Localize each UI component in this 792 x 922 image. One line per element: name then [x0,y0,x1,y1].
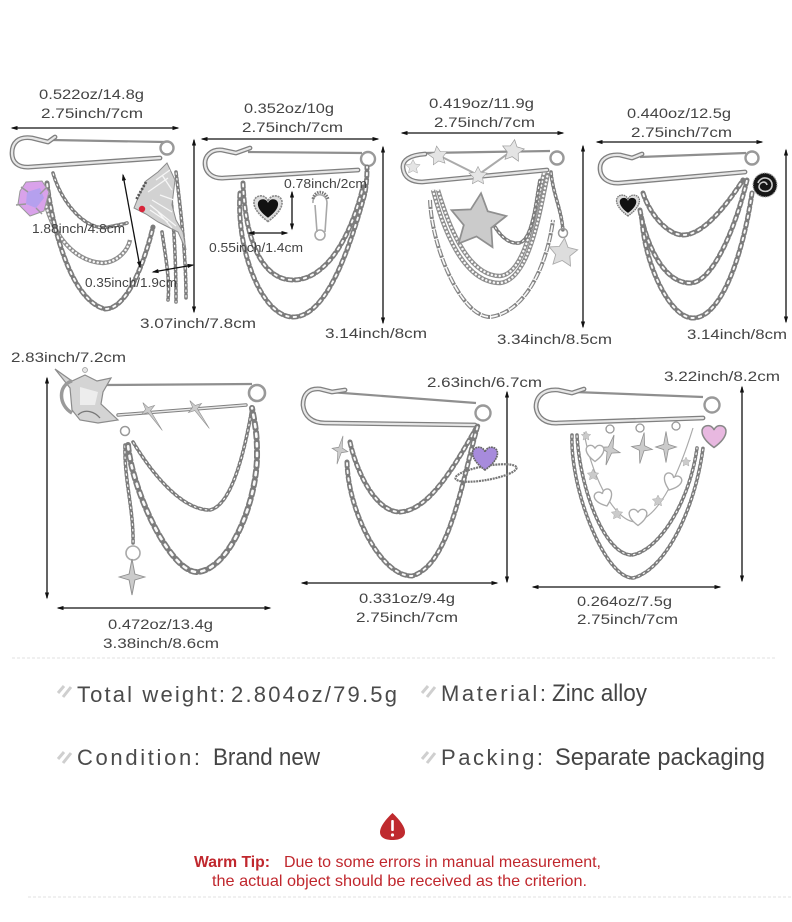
arrow: height [785,150,787,322]
heading: brooch 2 weight and width [242,100,343,135]
spec: total weight [58,682,397,707]
icon: warning drop [380,813,405,840]
spec: packing [422,744,765,771]
chains [240,167,367,317]
arrow: width [202,138,378,140]
caption: brooch 7 weight and width: 0.264oz/7.5g [577,593,672,609]
arrow: height [193,140,195,312]
icon: purple heart planet [454,447,518,485]
spec: condition: Condition: [77,745,200,770]
icon: heart and star chain charms [586,445,683,526]
caption: brooch 6 weight and width: 2.75inch/7cm [356,609,458,625]
icon: big star [448,190,508,248]
spec: packing: Separate packaging [555,744,765,771]
heading: brooch 1 weight and width: 0.522oz/14.8g [39,86,144,102]
arrow: height [382,147,384,323]
label: height: 3.14inch/8cm [687,326,787,342]
icon: four point star pendant [119,546,145,595]
heading: brooch 3 weight and width: 2.75inch/7cm [434,114,535,130]
chains [347,425,478,576]
spec: material [422,680,647,707]
pin body [600,152,758,183]
panel: brooch 7 [533,368,780,627]
arrow: width [597,141,762,143]
icon: black heart [254,196,282,222]
caption: brooch 5 weight and width: 3.38inch/8.6cm [103,635,219,651]
heading: brooch 2 weight and width: 0.352oz/10g [244,100,334,116]
icon: star constellation [406,138,525,184]
icon: cross stars on pin [136,396,216,435]
arrow: width [402,132,563,134]
chains [120,408,257,572]
spec: material: Zinc alloy [552,680,647,707]
spec: condition: Brand new [213,744,321,771]
icon: pink heart gem [702,426,726,448]
arrow: pendant length [123,175,140,267]
heading: brooch 4 weight and width: 0.440oz/12.5g [627,105,731,121]
panel: brooch 2 [202,100,427,341]
heading: brooch 4 weight and width [627,105,732,140]
caption: brooch 7 weight and width [577,593,678,627]
pin body [105,384,265,415]
arrow: width [58,607,270,609]
chains [43,172,186,309]
warm tip text: the actual object should be received as the criterion. [212,873,587,890]
pin body [12,137,174,167]
arrow: height [506,392,508,582]
arrow: height [741,387,743,581]
caption: brooch 5 weight and width [103,616,219,651]
icon: winged charm [134,163,186,250]
caption: brooch 7 weight and width: 2.75inch/7cm [577,611,678,627]
label: height: 3.22inch/8.2cm [664,368,780,384]
label: height: 3.07inch/7.8cm [140,315,256,331]
heading: brooch 3 weight and width: 0.419oz/11.9g [429,95,534,111]
panel: brooch 1 [12,86,256,331]
warm tip text: Warm Tip: [194,854,270,871]
spec: total weight: 2.804oz/79.5g [231,682,397,707]
icon: black rose [753,173,777,197]
panel: specifications [58,680,765,771]
label: heart width: 0.55inch/1.4cm [209,241,303,255]
arrow: height [582,146,584,327]
spec: total weight: Total weight: [77,682,225,707]
label: height: 3.34inch/8.5cm [497,331,612,347]
label: height: 3.14inch/8cm [325,325,427,341]
pin body [205,148,375,178]
label: chain length: 1.88inch/4.8cm [32,222,125,236]
heading: brooch 2 weight and width: 2.75inch/7cm [242,119,343,135]
panel: brooch 5 [11,349,270,651]
heading: brooch 3 weight and width [429,95,535,130]
warm tip text: Due to some errors in manual measurement, [284,854,601,871]
chains [572,428,703,578]
heading: brooch 1 weight and width [39,86,144,121]
icon: purple gem [16,181,49,216]
warm tip text [194,854,601,890]
caption: brooch 6 weight and width: 0.331oz/9.4g [359,590,455,606]
pin body [403,151,564,182]
arrow: width [12,127,178,129]
spec: condition [58,744,321,771]
icon: small star charm [329,434,351,466]
icon: small star [548,228,579,267]
arrow: charm width [153,265,193,272]
icon: black heart [617,195,639,216]
icon: small stars [581,431,691,519]
heading: brooch 1 weight and width: 2.75inch/7cm [41,105,143,121]
icon: pin head [55,368,118,423]
icon: four point star charms [596,422,680,468]
chains [430,172,563,317]
panel: brooch 4 [597,105,787,342]
arrow: heart height [291,192,293,229]
label: charm size: 0.35inch/1.9cm [85,276,177,290]
heading: brooch 4 weight and width: 2.75inch/7cm [631,124,732,140]
arrow: heart width [249,232,287,234]
icon: mini safety pin [313,192,328,240]
pin body [536,389,720,423]
arrow: width [302,582,497,584]
label: heart height: 0.78inch/2cm [284,177,367,191]
panel: brooch 3 [402,95,612,347]
label: height: 2.83inch/7.2cm [11,349,126,365]
arrow: width [533,586,720,588]
spec: packing: Packing: [441,745,543,770]
caption: brooch 5 weight and width: 0.472oz/13.4g [108,616,213,632]
panel: brooch 6 [302,374,542,625]
chains [640,180,752,318]
label: height: 2.63inch/6.7cm [427,374,542,390]
pin body [303,389,490,425]
spec: material: Material: [441,681,546,706]
caption: brooch 6 weight and width [356,590,458,625]
arrow: height [46,378,48,598]
